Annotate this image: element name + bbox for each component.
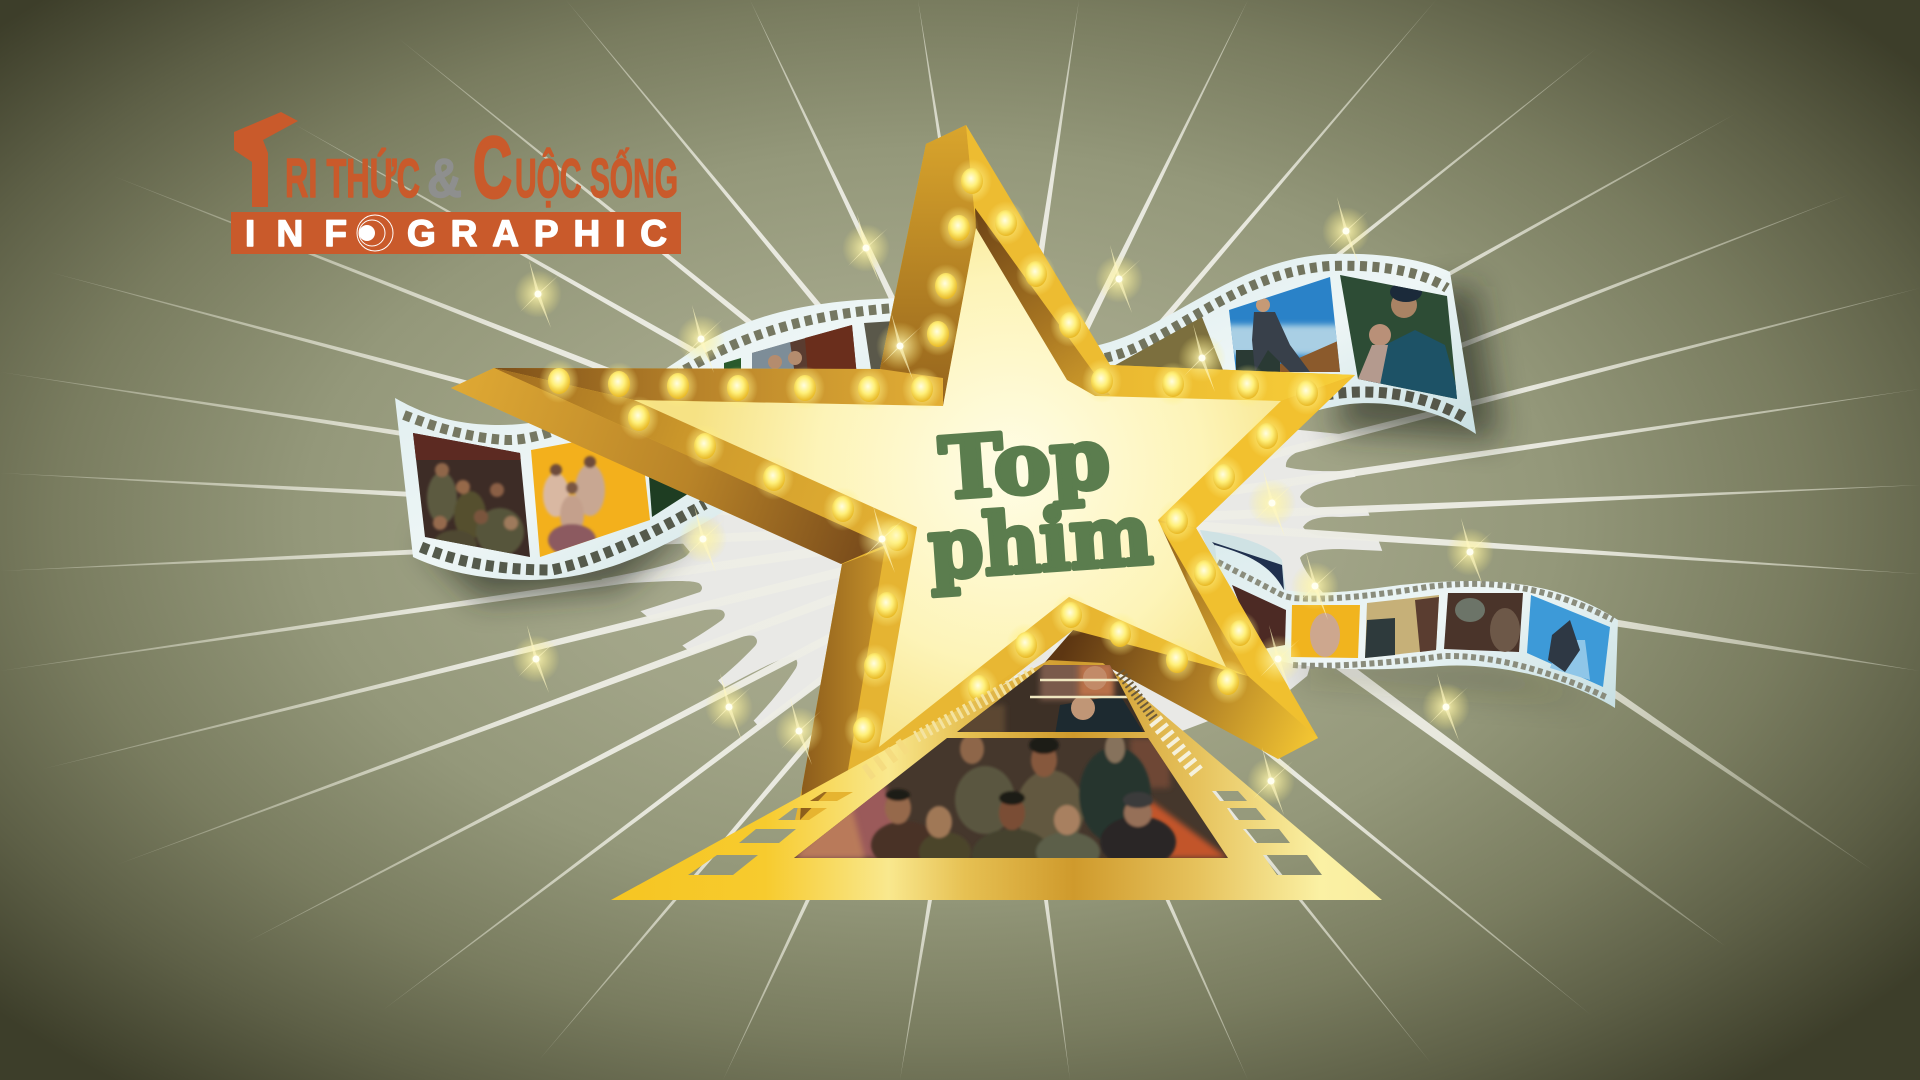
logo: Tri Thức & Cuộc Sống Infographic: C <box>473 120 512 216</box>
right arm band <box>1095 365 1355 401</box>
right arm lower band <box>1158 375 1355 528</box>
underside bevel <box>1040 630 1318 759</box>
poster: family portrait <box>1444 593 1523 652</box>
logo: Tri Thức & Cuộc Sống Infographic: & <box>427 147 462 209</box>
white burst behind the star <box>560 400 1400 800</box>
left arm lamp strip <box>494 368 917 545</box>
poster: soldiers <box>413 433 530 557</box>
bottom band right <box>1069 597 1318 738</box>
poster: interior scene <box>1365 595 1439 658</box>
poster: yellow comedy <box>531 442 650 557</box>
gold star <box>451 125 1355 820</box>
star silhouette <box>451 125 1355 820</box>
triangle body with perforations <box>611 660 1382 900</box>
film strip: left <box>395 298 900 580</box>
title: Top phim: Top <box>936 408 1113 518</box>
bottom band left <box>845 597 1073 790</box>
title: Top phim: phim <box>925 484 1155 598</box>
main film frame: soldiers poster <box>794 738 1228 858</box>
top inner bevel <box>975 208 1110 396</box>
poster: red action frame <box>1232 585 1286 650</box>
poster: yellow comedy small <box>1291 605 1360 658</box>
left arm lower bevel <box>451 368 885 564</box>
left arm top band <box>494 368 943 406</box>
poster: family group <box>752 325 857 377</box>
left leg outer <box>800 548 885 820</box>
golden film triangle <box>611 660 1382 900</box>
film strip: upper right <box>1095 254 1476 440</box>
second film frame <box>957 665 1145 732</box>
olive gaps between burst rays <box>450 355 1640 1080</box>
title: Top phim <box>919 405 1155 598</box>
poster: sepia frame <box>1110 317 1223 370</box>
film strip: lower right <box>1200 530 1618 708</box>
poster: couple in forest <box>1340 275 1457 399</box>
poster: green forest <box>649 440 725 517</box>
logo: Tri Thức & Cuộc Sống Infographic: INF <box>245 213 347 254</box>
top spire right strip <box>966 125 1110 396</box>
top spire left strip <box>880 125 976 406</box>
poster: blue sky fighter <box>1229 277 1340 372</box>
lower right arm band <box>1158 522 1318 738</box>
sparkles <box>512 197 1494 815</box>
small perforations <box>860 672 1200 778</box>
film strip shadows <box>420 285 1600 700</box>
logo: Tri Thức & Cuộc Sống Infographic <box>231 112 681 254</box>
logo: Tri Thức & Cuộc Sống Infographic: UỘC SỐNG <box>515 147 678 209</box>
cream star face <box>634 228 1281 747</box>
left leg lamp strip <box>848 527 917 790</box>
marquee lamps <box>539 159 1327 752</box>
poster: small dark frame <box>864 321 895 380</box>
poster: blue sky fighter small <box>1527 595 1610 687</box>
lower bevel inside right leg <box>1150 522 1248 676</box>
logo: Tri Thức & Cuộc Sống Infographic: GRAPHIC <box>407 213 667 254</box>
logo: Tri Thức & Cuộc Sống Infographic: RI THỨC <box>285 147 420 209</box>
